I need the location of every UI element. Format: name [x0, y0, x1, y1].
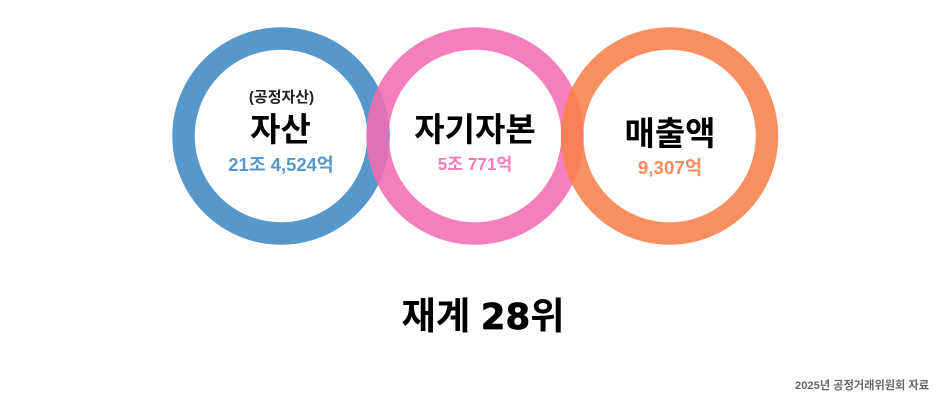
text: assets value: 21조 4,524억: [228, 154, 334, 175]
source note: 2025년 공정거래위원회 자료: [795, 380, 929, 392]
title: group rank: 재계 28위: [401, 295, 565, 338]
ring: revenue: [572, 38, 767, 234]
text: revenue heading: 매출액: [624, 115, 716, 152]
text: assets sublabel: (공정자산): [249, 89, 314, 106]
text: equity heading: 자기자본: [414, 111, 536, 148]
ring: equity: [378, 38, 572, 234]
text: equity value: 5조 771억: [438, 154, 512, 174]
ring: assets: [184, 38, 378, 234]
text: revenue value: 9,307억: [638, 157, 702, 178]
text: assets heading: 자산: [250, 111, 311, 148]
